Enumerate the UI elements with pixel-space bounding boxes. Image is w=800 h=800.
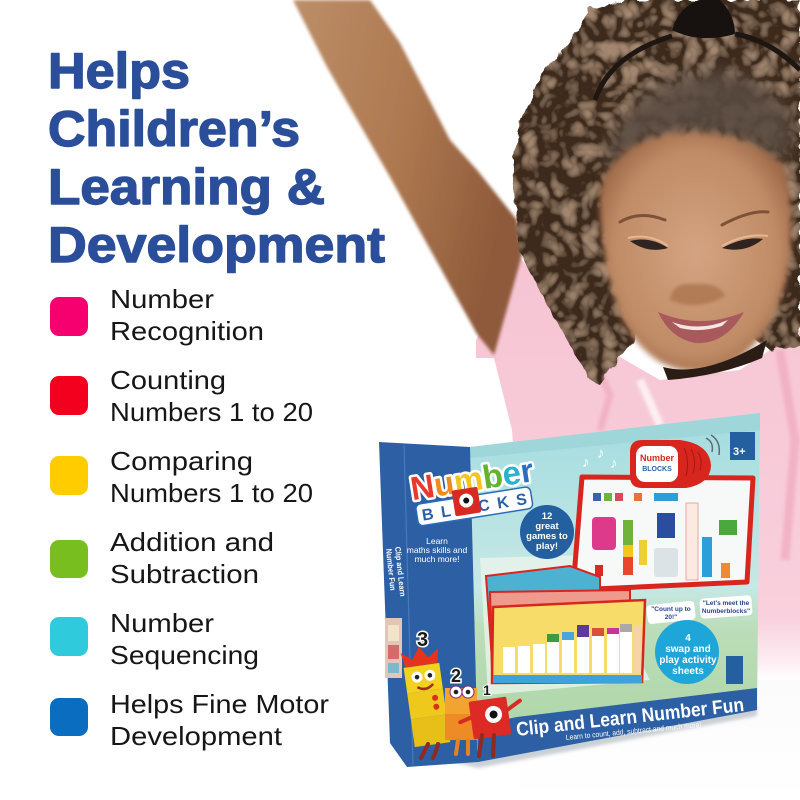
speaker unit: BLOCKS: [642, 466, 672, 473]
spine text: Clip and Learn: [393, 546, 407, 597]
spine edge: [404, 445, 413, 765]
sound waves: [706, 435, 719, 455]
logo blocks word: BLOCKS: [421, 491, 528, 525]
numeral 1: 1: [483, 682, 491, 698]
board buttons: [593, 493, 678, 501]
title: Children’s: [48, 101, 300, 157]
item: number sequencing: Sequencing: [110, 640, 259, 670]
item: number recognition: Number: [110, 284, 214, 314]
music notes: ♪: [610, 455, 618, 472]
box title: Clip and Learn Number Fun: [515, 694, 745, 741]
shirt: [476, 258, 800, 680]
pale panel behind sheets: [480, 555, 650, 695]
item: number sequencing: [50, 608, 259, 670]
badge: swap and play: swap and: [665, 644, 711, 655]
speech bubbles: "Let's meet the: [703, 600, 750, 607]
spine text: Number Fun: [384, 548, 397, 591]
badge: 12 games: 12: [542, 511, 552, 522]
item: number recognition: Recognition: [110, 316, 264, 346]
item: comparing: [50, 446, 313, 508]
publisher logo: [726, 656, 743, 684]
item: addition and subtraction: Addition and: [110, 527, 274, 557]
bottom band: [478, 688, 757, 762]
box spine: [379, 442, 478, 767]
music notes: ♪: [582, 454, 590, 471]
board characters: [592, 503, 737, 580]
badge: swap and play: [655, 620, 719, 684]
scalp sheen: [605, 70, 795, 180]
logo: Number: [408, 451, 536, 507]
badge: 12 games: play!: [536, 541, 558, 552]
nose: [670, 284, 725, 305]
face: [600, 132, 792, 372]
hair: [513, 0, 800, 385]
mouth: [658, 312, 744, 343]
speech bubbles: Numberblocks": [702, 608, 750, 615]
title: Helps: [48, 43, 190, 99]
title: Development: [48, 217, 385, 273]
eyes: [628, 235, 768, 250]
badge: 12 games: games to: [526, 531, 568, 542]
badge: 12 games: [520, 505, 574, 559]
speech bubbles: 20!": [665, 614, 677, 621]
speaker unit: [630, 440, 711, 488]
badge: swap and play: 4: [685, 633, 691, 644]
item: fine motor: [50, 689, 329, 751]
box top band: [470, 413, 760, 458]
item: comparing: Comparing: [110, 446, 253, 476]
neck and collar: [663, 340, 767, 380]
speaker unit: Number: [640, 453, 674, 463]
item: addition and subtraction: [50, 527, 274, 589]
logo blocks word: [414, 479, 533, 526]
music notes: ♪: [597, 445, 604, 462]
age badge: [730, 432, 755, 460]
front side caption: [407, 536, 468, 564]
numberblock one: [458, 695, 524, 741]
spine image thumbnail: [385, 618, 402, 678]
numberblock three: [400, 644, 451, 747]
characters: 3, 2, 1: [400, 629, 524, 758]
badge: 12 games: great: [535, 521, 559, 532]
raised arm: [293, 0, 522, 355]
spine text: [384, 546, 407, 597]
item: number recognition: [50, 284, 264, 346]
numeral 2: 2: [451, 666, 461, 686]
item: number sequencing: Number: [110, 608, 214, 638]
sound board: [573, 477, 753, 590]
photo: girl with raised arm: [293, 0, 800, 680]
hair tie: [672, 0, 735, 38]
numberblock two: [445, 686, 477, 740]
item: fine motor: Development: [110, 721, 283, 751]
numeral 3: 3: [417, 629, 428, 651]
item: fine motor: Helps Fine Motor: [110, 689, 329, 719]
product box: [379, 413, 760, 768]
front side caption: Learn: [426, 536, 448, 546]
music notes: [582, 445, 618, 472]
item: comparing: Numbers 1 to 20: [110, 478, 313, 508]
sheet number strip: [493, 675, 642, 683]
speech bubbles: "Count up to: [651, 606, 691, 613]
age badge: 3+: [733, 446, 746, 458]
eyebrows: [620, 212, 768, 225]
number bars: [503, 624, 641, 673]
badge: swap and play: sheets: [672, 666, 704, 677]
badge: swap and play: play activity: [659, 655, 717, 666]
list: skills: [50, 284, 329, 751]
table surface: [520, 680, 800, 800]
front side caption: maths skills and: [407, 545, 468, 555]
item: counting: Numbers 1 to 20: [110, 397, 313, 427]
front side caption: much more!: [415, 554, 459, 564]
box shadow: [392, 705, 757, 768]
title: Learning &: [48, 159, 325, 215]
item: addition and subtraction: Subtraction: [110, 559, 259, 589]
legs: [421, 735, 494, 758]
box title: Learn to count, add, subtract and much more!: [565, 720, 702, 742]
item: counting: Counting: [110, 365, 226, 395]
shirt fold shadows: [585, 340, 795, 560]
headband: [595, 34, 800, 100]
item: counting: [50, 365, 313, 427]
speech bubbles: [646, 595, 753, 624]
title: [48, 43, 385, 273]
activity sheets: [486, 566, 645, 683]
box front: [470, 413, 760, 762]
